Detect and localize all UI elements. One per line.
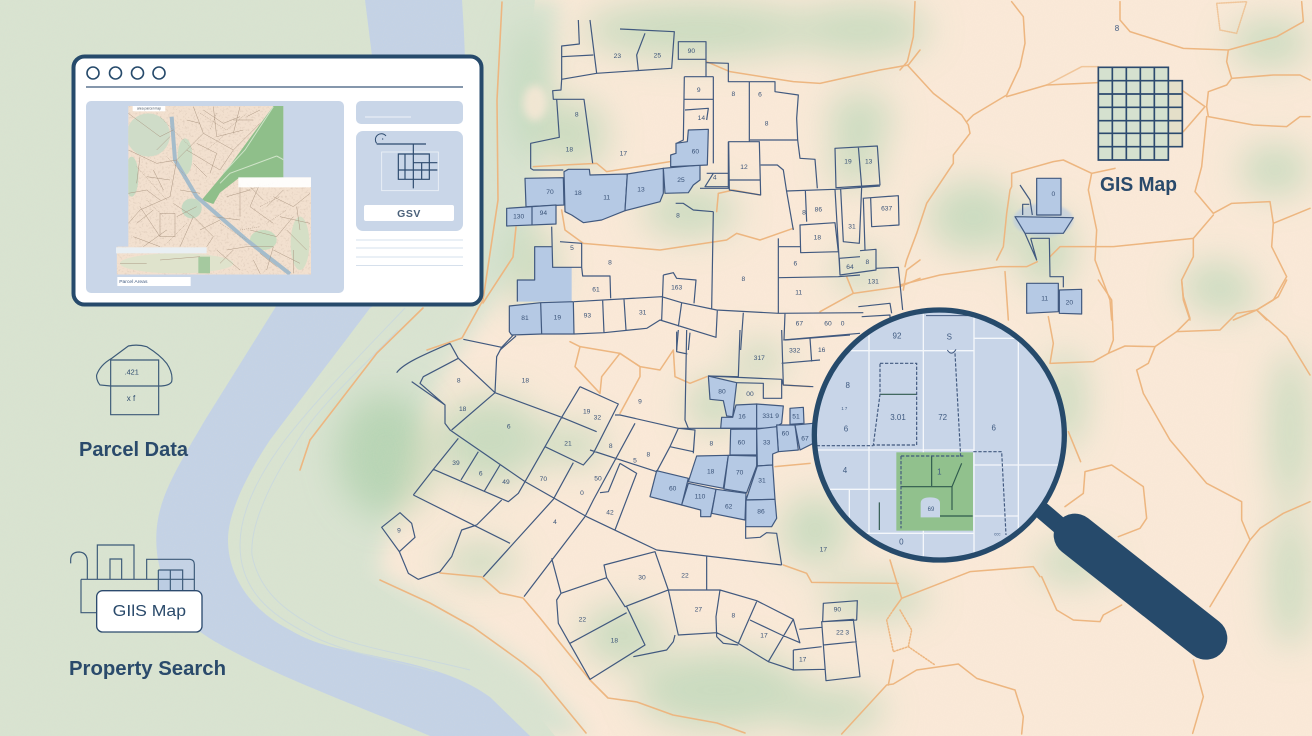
parcel numbers: 30 xyxy=(638,575,646,582)
parcel numbers: 8 xyxy=(709,440,713,447)
parcel numbers xyxy=(397,347,849,663)
parcel numbers: 32 xyxy=(594,414,601,421)
soft glow xyxy=(1013,203,1073,237)
parcel numbers: 70 xyxy=(736,470,744,477)
parcel numbers: 131 xyxy=(868,278,879,285)
GSV button xyxy=(364,205,454,221)
parcel numbers: 60 xyxy=(692,148,699,155)
numbers: 0 xyxy=(1051,191,1055,198)
GSV label: GSV xyxy=(397,208,421,220)
parcel lines xyxy=(879,394,973,530)
parcel numbers: 8 xyxy=(765,120,769,127)
lens numbers: 72 xyxy=(938,413,948,422)
contour roads: south xyxy=(783,560,1040,734)
parcel numbers: 9 xyxy=(638,399,642,406)
parcel numbers: 64 xyxy=(846,264,854,271)
parcel numbers: 8 xyxy=(575,112,579,119)
parcel numbers: 6 xyxy=(793,260,797,267)
parcel numbers: 70 xyxy=(540,476,547,483)
map panel xyxy=(86,101,344,293)
lens numbers: 1 7 xyxy=(841,406,848,411)
parcel numbers: 22 xyxy=(681,572,689,579)
icon: property search xyxy=(71,545,202,632)
parcel numbers: 67 xyxy=(801,436,809,443)
parcel numbers: 331 9 xyxy=(762,413,779,420)
icon: parcel data xyxy=(97,345,172,415)
parcel numbers: 8 xyxy=(865,259,869,266)
parcel numbers: 61 xyxy=(592,287,600,294)
parcel numbers: 62 xyxy=(725,503,733,510)
icon: parcel data: x f xyxy=(127,394,136,403)
parcel numbers: 60 xyxy=(669,485,677,492)
magnifying glass xyxy=(813,310,1206,638)
header field line xyxy=(365,116,411,118)
browser window mockup xyxy=(74,56,482,304)
parcel numbers: 6 xyxy=(507,424,511,431)
header field xyxy=(356,101,463,124)
parcel numbers: 0 xyxy=(580,490,584,497)
highlighted blue parcels xyxy=(507,129,708,335)
parcel numbers: 25 xyxy=(654,52,661,59)
parcel boundaries xyxy=(382,330,860,681)
parcel numbers: 93 xyxy=(584,313,591,320)
green vegetation patches xyxy=(435,2,1310,732)
parcel numbers: 6 xyxy=(479,470,483,477)
contour roads: coast xyxy=(300,2,745,733)
parcel numbers: 18 xyxy=(522,378,529,385)
darker shore vegetation xyxy=(337,393,433,517)
parcel numbers: 22 xyxy=(579,616,586,623)
label: Property Search: Property Search xyxy=(69,658,226,680)
parcel numbers: 130 xyxy=(513,214,525,221)
label: GIS Map: GIS Map xyxy=(1100,173,1177,196)
caption chip xyxy=(117,277,191,286)
parcel numbers: 60 xyxy=(738,440,745,447)
side tool panel xyxy=(356,131,463,231)
parcel numbers: 6 xyxy=(758,92,762,99)
contour roads: north-east xyxy=(900,2,1310,320)
parcel numbers: 14 xyxy=(698,115,705,122)
parcel numbers: 21 xyxy=(564,441,572,448)
parcel numbers: 9 xyxy=(397,527,401,534)
lens numbers: S xyxy=(947,332,952,341)
window frame xyxy=(74,56,482,304)
parcel numbers: 18 xyxy=(611,637,618,644)
parcel numbers: 110 xyxy=(695,494,706,501)
window buttons xyxy=(87,67,165,79)
map title chip xyxy=(133,106,165,111)
parcel numbers: 8 xyxy=(608,259,612,266)
parcel numbers: 9 xyxy=(697,87,701,94)
lens numbers: 1 xyxy=(937,468,942,477)
parcel numbers: 19 xyxy=(554,315,561,322)
parcel map: south district xyxy=(382,330,860,681)
lens content xyxy=(813,310,1064,560)
parcel numbers: 163 xyxy=(671,284,683,291)
parcel numbers: 8 xyxy=(457,377,461,384)
parcel numbers: 8 xyxy=(731,91,735,98)
parcel numbers: 23 xyxy=(614,53,621,60)
parcel numbers: 17 xyxy=(820,546,827,553)
search strip xyxy=(116,247,207,253)
parcel numbers: 13 xyxy=(637,187,645,194)
lens ring xyxy=(814,310,1064,560)
text lines xyxy=(356,240,463,266)
caption text: Parcel Areas xyxy=(119,279,148,285)
parcel numbers: 17 xyxy=(799,656,807,663)
parcel numbers: 86 xyxy=(815,206,822,213)
house marker xyxy=(921,497,940,517)
parcel numbers: 17 xyxy=(620,150,627,157)
parcel numbers: 94 xyxy=(540,210,547,217)
parcel numbers: 90 xyxy=(834,606,841,613)
parcel numbers: 42 xyxy=(606,509,614,516)
parcel numbers: 11 xyxy=(795,289,802,296)
icon: GIS grid xyxy=(1098,67,1182,160)
river xyxy=(156,0,530,736)
parcel numbers: 13 xyxy=(865,158,873,165)
parcel numbers: 18 xyxy=(459,406,467,413)
parcel numbers: 5 xyxy=(633,457,637,464)
parcel numbers: 317 xyxy=(754,355,765,362)
parcel cluster: east xyxy=(1013,178,1082,314)
lens numbers xyxy=(841,331,1001,546)
parcel map: north district xyxy=(500,20,903,350)
parcel numbers: 18 xyxy=(814,234,821,241)
search label box xyxy=(97,591,202,632)
highlighted blue parcels xyxy=(650,376,813,527)
numbers: 11 xyxy=(1041,295,1048,302)
parcel numbers: 18 xyxy=(574,190,582,197)
lens numbers: 92 xyxy=(893,331,902,340)
parcel numbers: 8 xyxy=(676,212,680,219)
parcel numbers: 8 xyxy=(802,210,806,217)
parcel numbers: 39 xyxy=(452,460,460,467)
parcel numbers: 25 xyxy=(677,177,685,184)
parcel numbers: 81 xyxy=(521,315,529,322)
search label text: GIlS Map xyxy=(113,603,186,620)
parcel numbers: 18 xyxy=(707,468,715,475)
parcel numbers: 4 xyxy=(553,519,557,526)
parcel numbers: 22 3 xyxy=(836,630,849,637)
lens numbers: ccc xyxy=(994,532,1001,537)
lens numbers: 0 xyxy=(899,537,904,546)
parcel numbers: 332 xyxy=(789,348,801,355)
grid tool icon xyxy=(375,134,438,191)
parcel numbers: 0 xyxy=(841,320,845,327)
parcel numbers: 60 xyxy=(824,321,832,328)
parcel numbers: 8 xyxy=(731,612,735,619)
parcel numbers: 637 xyxy=(881,206,893,213)
blue parcels xyxy=(1015,178,1082,314)
window divider xyxy=(86,86,463,88)
boundaries xyxy=(1020,185,1063,287)
parcel numbers: 49 xyxy=(502,479,510,486)
lens numbers: 69 xyxy=(928,507,935,513)
parcel numbers: 16 xyxy=(818,347,826,354)
parcel numbers: 16 xyxy=(738,413,746,420)
embedded map xyxy=(116,106,317,286)
lens numbers: 8 xyxy=(845,381,850,390)
pale green shore, soft edge xyxy=(0,0,590,736)
parcel numbers: 12 xyxy=(740,164,748,171)
lens numbers: 4 xyxy=(843,466,848,475)
parcel numbers: 31 xyxy=(758,478,766,485)
inset map header xyxy=(238,177,311,187)
parcel numbers: 00 xyxy=(746,391,754,398)
parcel numbers: 50 xyxy=(594,476,602,483)
parcel boundaries xyxy=(500,20,903,350)
parcel numbers: 67 xyxy=(796,321,803,328)
parcel numbers: 4 xyxy=(713,174,717,181)
parcel numbers: 31 xyxy=(848,224,856,231)
icon: parcel data: .421 xyxy=(125,367,139,376)
small peach clearing xyxy=(523,85,547,121)
handle xyxy=(1043,512,1206,638)
faint river contour lines xyxy=(240,308,470,672)
parcel numbers: 19 xyxy=(844,158,852,165)
parcel numbers: 86 xyxy=(757,508,765,515)
pale green shore, solid interior xyxy=(0,0,555,736)
parcel numbers: 11 xyxy=(603,195,610,202)
parcel numbers: 90 xyxy=(688,48,695,55)
parcel numbers: 70 xyxy=(546,189,554,196)
parcel numbers: 51 xyxy=(792,414,800,421)
highlighted green parcel xyxy=(896,452,973,531)
parcel numbers: 60 xyxy=(782,430,789,437)
contour roads: centre xyxy=(570,342,810,467)
parcel numbers: 17 xyxy=(760,632,768,639)
numbers xyxy=(1041,191,1073,306)
label: Parcel Data: Parcel Data xyxy=(79,439,189,461)
parcel numbers: 5 xyxy=(570,245,574,252)
contour roads: south-east xyxy=(1042,280,1310,733)
lens numbers: 3.01 xyxy=(890,413,906,422)
numbers: 20 xyxy=(1066,299,1073,306)
parcel numbers: 8 xyxy=(741,276,745,283)
parcel numbers: 18 xyxy=(566,147,573,154)
parcel numbers: 8 xyxy=(609,443,613,450)
small map marker: 8 xyxy=(1115,24,1120,33)
parcel numbers: 80 xyxy=(718,389,726,396)
parcel numbers: 19 xyxy=(583,408,591,415)
lens numbers: 6 xyxy=(844,424,849,433)
parcel numbers: 33 xyxy=(763,439,771,446)
contour roads: north xyxy=(533,50,920,312)
lens numbers: 6 xyxy=(991,423,996,432)
parcel numbers: 27 xyxy=(695,607,702,614)
parcel numbers xyxy=(513,48,893,328)
map title text: area parcel map xyxy=(137,107,161,111)
parcel numbers: 31 xyxy=(639,310,647,317)
parcel numbers: 8 xyxy=(646,451,650,458)
